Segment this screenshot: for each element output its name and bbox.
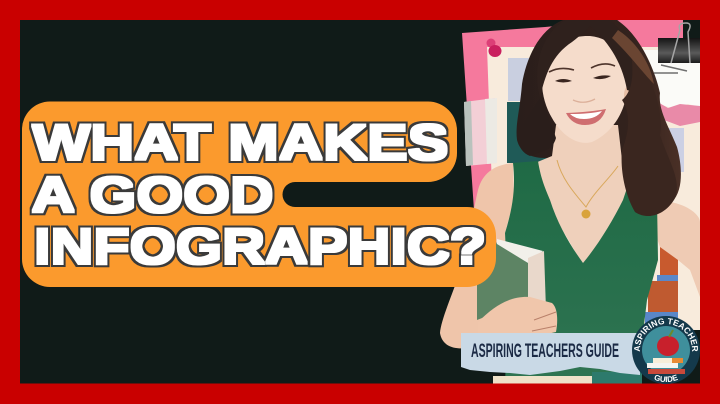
badge top text: ASPIRING TEACHER	[634, 318, 698, 352]
left side hair	[520, 134, 556, 156]
dark corner	[683, 20, 700, 38]
pink torn strip	[660, 104, 700, 126]
eyes	[555, 75, 611, 82]
smile	[566, 109, 606, 125]
icon: binder clip	[654, 23, 700, 73]
tape pale edge	[485, 98, 497, 164]
badge disc	[632, 316, 700, 384]
orange banner shape	[22, 102, 496, 287]
background shelves	[645, 247, 678, 332]
title text	[32, 114, 486, 274]
badge inner circle	[642, 326, 690, 374]
hair back	[516, 20, 681, 200]
hair highlight	[612, 30, 654, 84]
pink paper backing	[462, 20, 683, 208]
trousers	[493, 376, 592, 384]
icon: apple	[657, 330, 679, 356]
title line 3: INFOGRAPHIC?	[34, 218, 486, 274]
lavender card right	[668, 128, 684, 172]
ear	[624, 88, 629, 98]
cream paper sheet	[487, 47, 700, 330]
badge: Aspiring Teacher Guide logo	[632, 316, 700, 384]
icon: stack of books	[647, 358, 685, 374]
nose	[573, 99, 595, 102]
hand holding book	[482, 296, 558, 333]
teeth	[570, 111, 602, 119]
icon: push pin	[486, 38, 502, 57]
title line 2: A GOOD	[32, 167, 274, 223]
washi tape	[464, 98, 497, 166]
hair fringe	[542, 36, 630, 90]
badge bottom text: GUIDE	[654, 374, 678, 382]
book	[477, 239, 546, 320]
right side hair waves	[622, 45, 677, 216]
lavender card	[508, 58, 530, 101]
neck and chest	[538, 125, 626, 263]
necklace	[557, 160, 618, 218]
teal base	[592, 372, 642, 384]
face	[542, 36, 627, 143]
caption strip	[461, 333, 640, 375]
teal card	[507, 102, 547, 163]
tape grey edge	[464, 101, 473, 166]
title line 1: WHAT MAKES	[32, 114, 448, 170]
torn paper label	[461, 333, 640, 375]
white torn paper	[640, 50, 700, 109]
eyebrows	[549, 64, 615, 72]
right arm and shoulder	[657, 202, 700, 296]
green sleeveless dress	[505, 161, 658, 384]
left arm and shoulder	[440, 163, 514, 348]
photo collage and teacher	[440, 20, 700, 385]
finger creases	[532, 312, 556, 331]
title banner	[22, 102, 496, 287]
